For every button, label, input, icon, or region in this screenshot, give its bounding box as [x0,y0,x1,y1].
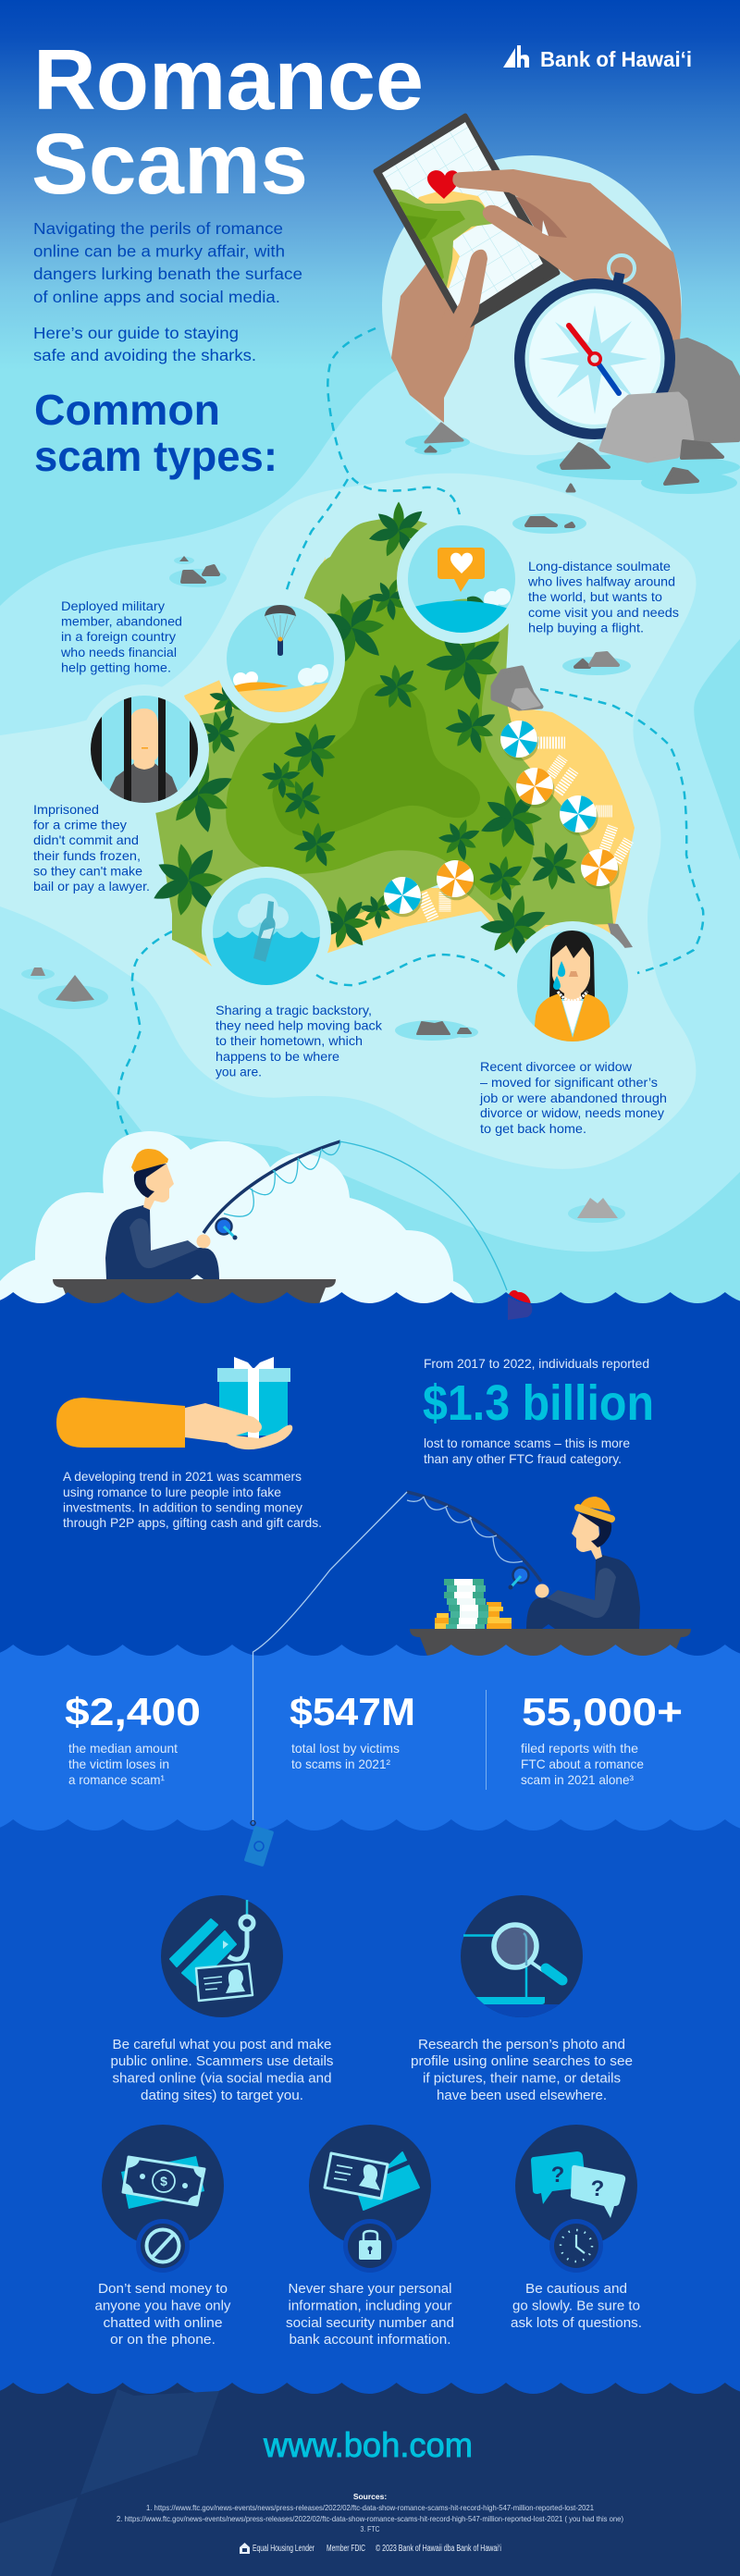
bait heart [508,1290,531,1308]
stat: 2,400: the median amount [68,1741,178,1756]
title: Romance [33,31,424,128]
boat: first fisherman [53,1279,336,1309]
light water layer around island [0,474,696,1169]
compass needle [569,326,595,359]
mid water layer [0,365,740,1251]
caption: tragic backstory: you are. [216,1064,262,1078]
intro text: Navigating the perils of romance [33,219,283,238]
fishing rod two [407,1492,541,1589]
tip text: be cautious: go slowly. Be sure to [512,2298,640,2314]
text: developing trend: A developing trend in 2021 was scammers [63,1469,302,1484]
caption: imprisoned: for a crime they [33,818,127,832]
sleeve [56,1398,185,1448]
caption: long-distance soulmate [527,559,679,635]
tip text: do not send money [94,2281,231,2348]
tip text: research: if pictures, their name, or details [423,2070,621,2087]
tip text: research: have been used elsewhere. [437,2088,607,2103]
intro text: online can be a murky affair, with [33,242,285,261]
stat: 547M: total lost by victims [291,1741,400,1756]
caption: tragic backstory: they need help moving back [216,1017,383,1032]
island [155,518,635,970]
stack of money bills [444,1579,488,1630]
tip text: be careful: shared online (via social media and [113,2070,331,2087]
intro text: of online apps and social media. [33,288,280,306]
tip text: do not send money: chatted with online [104,2315,222,2331]
stat: 2,400: the victim loses in [68,1756,169,1771]
caption: imprisoned: bail or pay a lawyer. [33,879,150,894]
stat divider [486,1690,487,1790]
tip text: be cautious [511,2281,642,2331]
callout: 1.3 billion: than any other FTC fraud category. [424,1451,622,1466]
beach umbrellas [380,718,623,919]
stat: 2,400: $2,400 [65,1690,201,1733]
stat: 2,400 [65,1690,201,1787]
tip icon: money with no sign [102,2125,224,2273]
intro text: Here’s our guide to staying [33,324,239,342]
caption: long-distance soulmate: help buying a flight. [528,621,644,635]
heart on map [427,170,459,199]
caption: deployed military: member, abandoned [61,614,182,629]
caption: long-distance soulmate: the world, but wants to [528,589,662,604]
tip text: be cautious: Be cautious and [525,2281,627,2297]
caption: recent divorcee or widow [479,1059,667,1136]
caption: imprisoned: Imprisoned [33,802,99,817]
callout: 1.3 billion: From 2017 to 2022, individuals reported [424,1356,649,1371]
background sky gradient [0,0,740,370]
illustration: tablet held in hands [376,116,681,423]
fishing rod one [204,1141,507,1290]
deep blue sea wave [0,1292,740,1656]
sources [117,2492,623,2533]
bright blue sea wave [0,1645,740,1838]
submerged bait heart [508,1297,532,1320]
callout: 1.3 billion [423,1356,654,1466]
tip icon: ID with lock [309,2125,431,2273]
caption: tragic backstory: to their hometown, which [216,1033,363,1048]
foreground rocks near compass [561,394,722,484]
legal line [240,2543,501,2554]
text: developing trend: through P2P apps, gifting cash and gift cards. [63,1515,322,1530]
tip text: research: profile using online searches to see [411,2053,633,2069]
footer navy wave [0,2383,740,2576]
cloud behind fisherman [0,1131,475,1304]
tip icon: questions with clock: ? [591,2176,604,2201]
boat: second fisherman [410,1629,691,1658]
website url: www.boh.com [263,2426,473,2464]
callout: 1.3 billion: lost to romance scams – this is more [424,1436,630,1450]
sources: 3. FTC [361,2524,379,2533]
caption: deployed military: help getting home. [61,660,171,675]
tip icon: magnifier over laptop [461,1895,583,2017]
tip icon: questions with clock: ? [551,2163,564,2188]
text: developing trend: investments. In addition to sending money [63,1500,302,1515]
light green land [155,518,613,962]
tip text: never share: bank account information. [289,2332,451,2348]
caption: recent divorcee or widow: – moved for significant other’s [480,1075,658,1090]
tip text: never share: social security number and [286,2315,454,2331]
caption: recent divorcee or widow: Recent divorcee or widow [480,1059,633,1074]
tip text: be careful: Be careful what you post and make [113,2037,331,2052]
fisherman one [105,1149,219,1279]
compass star [539,305,648,414]
caption: recent divorcee or widow: job or were abandoned through [479,1091,667,1105]
caption: tragic backstory: happens to be where [216,1049,339,1064]
text: developing trend [63,1469,322,1530]
vignette: heart notification [397,514,526,644]
beach loungers [422,743,629,919]
fishing line two [253,1492,407,1822]
vignette: prisoner behind bars [80,684,209,814]
intro text: safe and avoiding the sharks. [33,346,256,364]
shadow between fingers [515,196,567,238]
tip text: never share: Never share your personal [289,2281,451,2297]
tip text: be careful: public online. Scammers use details [111,2053,333,2069]
caption: imprisoned: didn't commit and [33,832,139,847]
tip text: do not send money: anyone you have only [94,2298,231,2314]
logo: Bank of Hawaii: Bank of Hawai‘i [540,47,692,71]
intro text: dangers lurking benath the surface [33,265,302,283]
tip text: never share: information, including your [289,2298,452,2314]
dark green land [272,684,480,836]
caption: deployed military: who needs financial [60,645,177,659]
screen sliver between fingers [542,220,549,236]
sources: Sources: [353,2492,387,2501]
tip text: do not send money: Don’t send money to [98,2281,228,2297]
puddles and rocks below the hand [405,424,740,494]
tip text: be careful [111,2037,333,2103]
caption: long-distance soulmate: who lives halfway around [527,574,675,589]
gift box [219,1380,288,1436]
beach rocks [493,668,633,949]
beach sand [172,557,635,970]
caption: recent divorcee or widow: to get back home. [480,1121,586,1136]
dashed route lines [117,328,703,1135]
caption: imprisoned: their funds frozen, [33,848,141,863]
thumb of lower hand [442,250,487,342]
stat: 2,400: a romance scam¹ [68,1772,165,1787]
stack of coins [435,1602,512,1630]
small rocks scattered in the sea [21,513,631,1223]
tip text: never share [286,2281,454,2348]
stat: 55,000+: scam in 2021 alone³ [521,1772,634,1787]
legal line: © 2023 Bank of Hawaii dba Bank of Hawai‘i [376,2544,501,2554]
tip icon: hook and ID [161,1895,283,2017]
caption: long-distance soulmate: come visit you and needs [528,605,679,620]
title [31,31,424,212]
back rock behind compass [648,339,738,442]
caption: imprisoned: so they can't make [33,864,142,879]
compass [514,255,675,439]
stat: 55,000+: FTC about a romance [521,1756,644,1771]
stat: 55,000+: 55,000+ [522,1690,683,1733]
heading: common scam types: scam types: [34,432,278,480]
sources: 1. https://www.ftc.gov/news-events/news/press-releases/2022/02/ftc-data-show-romance-scams-hit-record-high-547-million-reported-lost-2021 [146,2503,594,2512]
caption: recent divorcee or widow: divorce or widow, needs money [480,1105,664,1120]
mid blue sea wave [0,1819,740,2396]
stat: 547M: to scams in 2021² [291,1756,390,1771]
caption: tragic backstory [216,1003,383,1078]
stat: 55,000+: filed reports with the [521,1741,638,1756]
stat: 547M [290,1690,415,1771]
text: developing trend: using romance to lure people into fake [63,1485,281,1499]
vignette: parachute [216,594,345,723]
vignette: message in a bottle [202,867,331,985]
icon: hand offering gift [56,1357,292,1449]
caption: deployed military [60,598,182,675]
caption: deployed military: Deployed military [61,598,165,613]
vignette: crying woman [516,921,628,1041]
tablet frame [376,116,558,328]
tip text: do not send money: or on the phone. [110,2332,216,2348]
footer light shapes [0,2389,219,2576]
palm trees [142,501,585,968]
tip icon: money with no sign: $ [160,2174,167,2188]
caption: long-distance soulmate: Long-distance soulmate [528,559,671,573]
tip text: be cautious: ask lots of questions. [511,2315,642,2331]
hand [185,1403,292,1449]
tip text: research [411,2037,633,2103]
tip text: research: Research the person’s photo and [418,2037,625,2052]
tablet screen with map [379,122,543,319]
stat: 547M: $547M [290,1690,415,1733]
mid green land [226,598,534,900]
caption: deployed military: in a foreign country [61,629,176,644]
hooked money bill [244,1820,274,1867]
heading: common scam types: Common [34,386,220,434]
title: Scams [31,116,308,212]
intro text [33,219,302,364]
heading: common scam types [34,386,278,480]
caption: imprisoned [33,802,150,894]
sources: 2. https://www.ftc.gov/news-events/news/press-releases/2022/02/ftc-data-show-romance-scams-hit-record-high-547-million-reported-lost-2021 ( you had this one) [117,2514,623,2523]
legal line: Equal Housing Lender [253,2544,314,2554]
upper hand [452,169,681,370]
callout: 1.3 billion: $1.3 billion [423,1375,654,1431]
tip icon: questions with clock [515,2125,637,2273]
palm of lower hand [391,259,487,423]
halo circle behind hands [382,155,682,455]
tip text: be careful: dating sites) to target you. [141,2088,303,2103]
fisherman two [526,1497,640,1629]
base water [0,370,740,1323]
legal line: Member FDIC [327,2544,365,2554]
stat: 55,000+ [521,1690,683,1787]
caption: tragic backstory: Sharing a tragic backstory, [216,1003,372,1017]
